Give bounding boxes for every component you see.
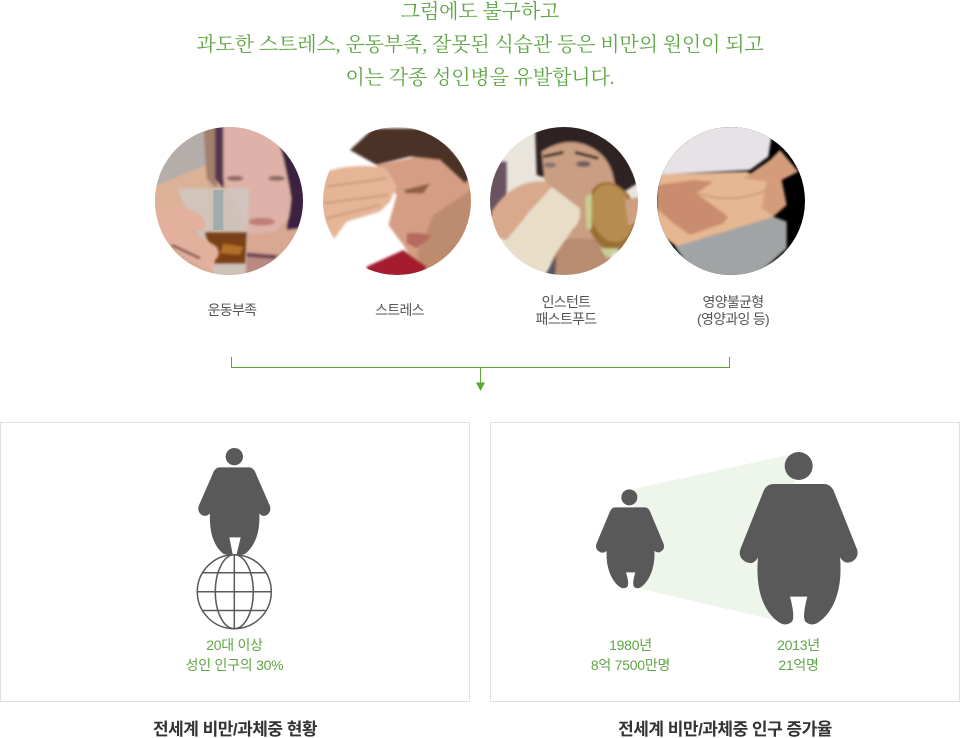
heading text: 이는 각종 성인병을 유발합니다. [345, 67, 615, 89]
label: instant fast food: 패스트푸드 [536, 311, 596, 327]
panel: population increase [490, 422, 960, 702]
caption: adults 30 percent: 20대 이상 [206, 637, 263, 653]
globe [197, 555, 271, 629]
caption: 1980: 8억 7500만명 [591, 656, 670, 672]
caption: 2013: 21억명 [778, 656, 819, 672]
bracket connector and arrow [232, 357, 730, 391]
heading text: 그럼에도 불구하고 [401, 1, 559, 23]
heading text: 과도한 스트레스, 운동부족, 잘못된 식습관 등은 비만의 원인이 되고 [196, 34, 764, 56]
heading text [196, 0, 764, 89]
icon: growth wedge with two figures [596, 452, 858, 624]
label: nutrient imbalance: 영양불균형 [703, 294, 763, 310]
label: instant fast food: 인스턴트 [542, 294, 590, 310]
caption: 1980: 1980년 [609, 637, 652, 653]
caption: adults 30 percent: 성인 인구의 30% [186, 656, 283, 672]
label: instant fast food [536, 294, 596, 327]
label: lack of exercise: 운동부족 [208, 302, 256, 318]
label: nutrient imbalance [697, 294, 769, 327]
figure 2013 [740, 452, 858, 624]
photo: person with glass (lack of exercise) [153, 125, 307, 278]
figure 1980 [596, 489, 664, 588]
label: nutrient imbalance: (영양과잉 등) [697, 311, 769, 327]
caption: 1980 [591, 637, 670, 672]
panel: worldwide status [0, 422, 470, 702]
caption: 2013: 2013년 [777, 637, 820, 653]
photo: man eating fast food [488, 125, 645, 278]
label: stress: 스트레스 [375, 302, 424, 318]
caption: adults 30 percent [186, 637, 284, 672]
photo: man with headache (stress) [320, 125, 477, 278]
caption: 2013 [777, 637, 820, 672]
icon: obese figure on globe [197, 448, 271, 629]
photo: belly (nutrient imbalance) [657, 125, 807, 278]
